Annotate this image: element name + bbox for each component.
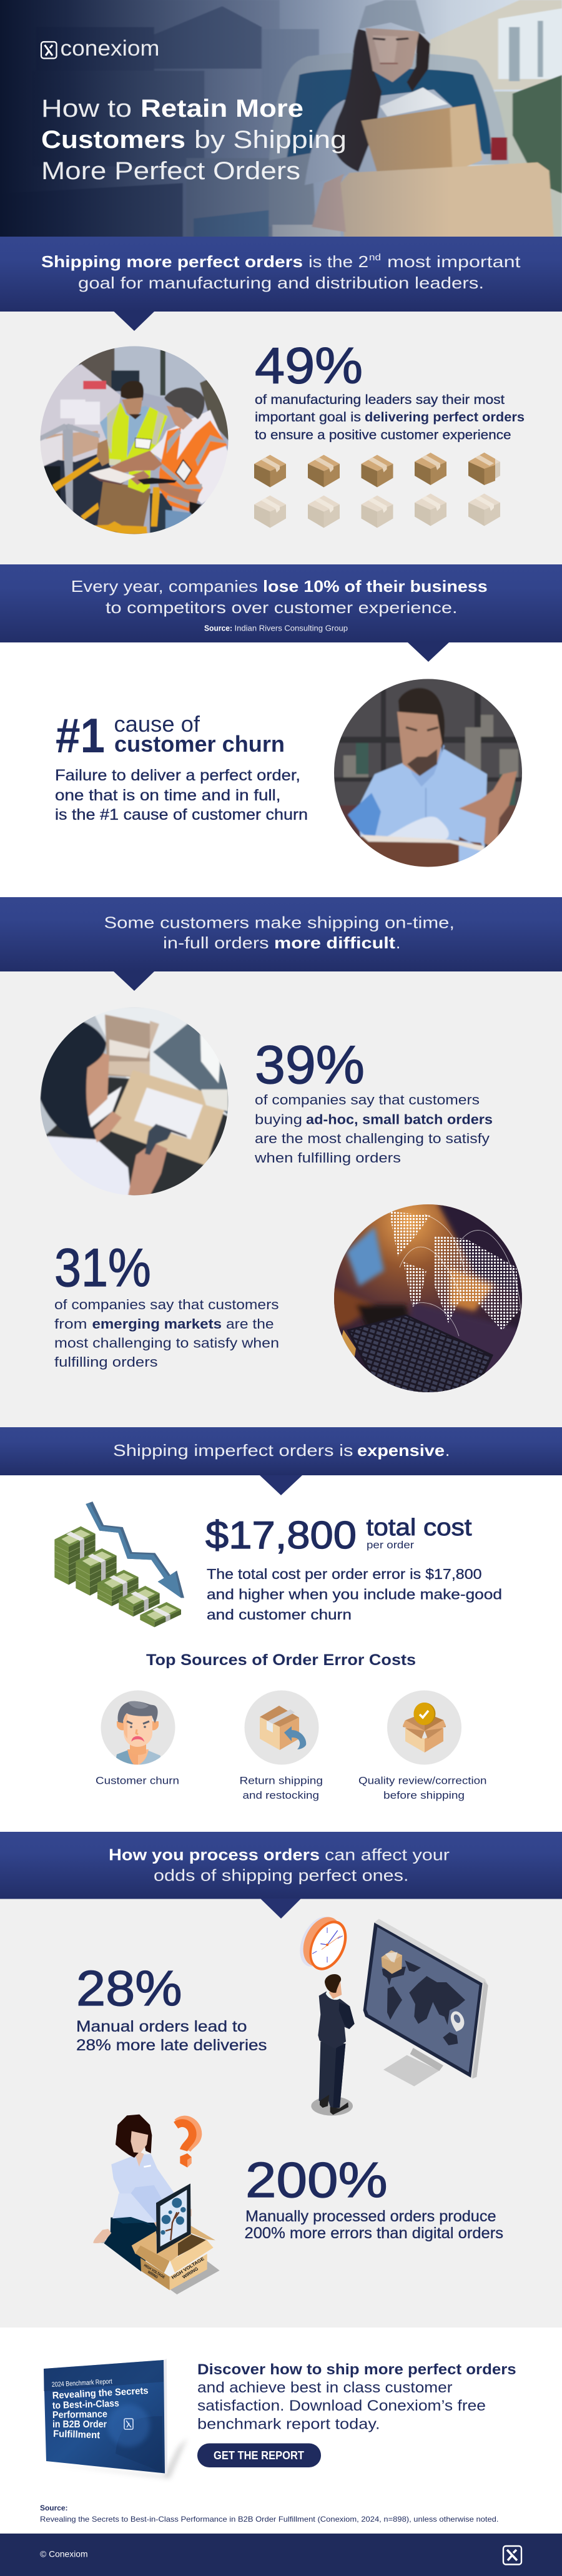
stat: number one cause of churn: #1 xyxy=(56,708,105,763)
banner: some customers: Some customers make shipping on-time, xyxy=(104,913,455,932)
banner: imperfect orders expensive xyxy=(0,1427,562,1495)
stat: total cost per order: and customer churn xyxy=(207,1606,352,1623)
stat: 49 percent: delivering perfect orders xyxy=(365,410,525,425)
banner: imperfect orders expensive: . xyxy=(445,1441,450,1460)
illustration: woman unpacking box: HIGH VOLTAGE xyxy=(143,2264,165,2279)
source note: Source: xyxy=(40,2504,67,2512)
banner: some customers: . xyxy=(396,933,400,952)
stat: 39 percent: of companies say that customers xyxy=(255,1092,480,1108)
man in suit xyxy=(311,1974,355,2116)
icon: conexiom mark xyxy=(503,2546,521,2565)
stat: total cost per order: total cost xyxy=(366,1515,472,1541)
stat: number one cause of churn: Failure to deliver a perfect order, xyxy=(55,767,300,784)
button: get the report xyxy=(197,2444,321,2467)
button: get the report: GET THE REPORT xyxy=(214,2449,304,2462)
stat: 49 percent: 49% xyxy=(255,337,363,395)
banner: lose 10 percent: Indian Rivers Consulting Group xyxy=(235,623,348,633)
panel: section one background xyxy=(0,312,562,564)
illustration: woman unpacking box xyxy=(93,2115,220,2294)
stat: 31 percent: are the xyxy=(226,1316,274,1332)
icon: customer churn xyxy=(101,1691,175,1765)
icon: quality review box xyxy=(387,1691,461,1764)
call to action text: and achieve best in class customer xyxy=(197,2379,452,2396)
photo: woman scanning parcel xyxy=(37,1005,231,1199)
call to action text: satisfaction. Download Conexiom’s free xyxy=(197,2397,486,2414)
stat: 39 percent xyxy=(254,1035,493,1166)
title: Retain More xyxy=(140,95,303,122)
report book cover: to Best-in-Class xyxy=(52,2398,119,2411)
stat: total cost per order: per order xyxy=(367,1539,414,1551)
stat: 200 percent: 200% more errors than digital orders xyxy=(245,2225,503,2242)
illustration: woman unpacking box: WIRING xyxy=(181,2266,199,2280)
photo: warehouse workers xyxy=(37,343,231,537)
illustration: woman unpacking box: HIGH VOLTAGE xyxy=(170,2256,205,2280)
stat: 200 percent xyxy=(245,2152,503,2242)
footer xyxy=(0,2534,562,2576)
stat: number one cause of churn: is the #1 cause of customer churn xyxy=(55,806,308,823)
panel: section three background xyxy=(0,971,562,1427)
banner: lose 10 percent: to competitors over customer experience. xyxy=(106,598,457,617)
stat: total cost per order xyxy=(205,1514,502,1623)
label: quality review before shipping: before shipping xyxy=(383,1789,465,1801)
title: How to xyxy=(41,95,132,122)
panel: section five background xyxy=(0,1899,562,2328)
stat: 31 percent: fulfilling orders xyxy=(54,1354,158,1370)
stat: 39 percent: when fulfilling orders xyxy=(254,1150,401,1166)
stat: 39 percent: are the most challenging to satisfy xyxy=(255,1131,490,1146)
title: Customers xyxy=(41,126,185,154)
stat: 28 percent: 28% more late deliveries xyxy=(76,2037,267,2054)
hero photo panel xyxy=(0,0,562,237)
banner: some customers: in-full orders xyxy=(163,933,269,952)
label: quality review before shipping: Quality review/correction xyxy=(358,1774,487,1787)
report book cover xyxy=(44,2359,187,2479)
stat: total cost per order: and higher when you include make-good xyxy=(207,1586,502,1602)
photo: frustrated customer xyxy=(331,677,526,871)
stat: 49 percent: to ensure a positive customer experience xyxy=(255,428,511,442)
source note xyxy=(40,2504,498,2524)
banner: shipping more perfect orders: nd xyxy=(369,252,381,263)
icon row: 49 of 100 boxes xyxy=(254,453,500,528)
call to action text xyxy=(197,2361,516,2432)
stat: 28 percent: Manual orders lead to xyxy=(76,2018,247,2035)
banner: some customers xyxy=(0,897,562,991)
banner: how you process orders: How you process orders xyxy=(109,1846,320,1864)
stat: number one cause of churn: one that is on time and in full, xyxy=(55,787,281,804)
report book cover: Performance xyxy=(52,2409,107,2421)
label: return shipping and restocking xyxy=(240,1774,323,1801)
stat: 39 percent: 39% xyxy=(255,1035,365,1095)
stat: 28 percent: 28% xyxy=(76,1960,182,2016)
icon: return shipping box xyxy=(245,1691,318,1764)
illustration: money stacks and falling arrow xyxy=(54,1502,184,1627)
stat: 39 percent: buying xyxy=(255,1111,302,1128)
report book cover: in B2B Order xyxy=(52,2419,107,2430)
banner: lose 10 percent: Every year, companies xyxy=(71,577,258,596)
banner: lose 10 percent: lose 10% of their business xyxy=(263,577,488,596)
banner: how you process orders: can affect your xyxy=(325,1846,450,1864)
photo: laptop with world map xyxy=(331,1202,526,1399)
stat: 31 percent xyxy=(54,1238,279,1370)
banner: how you process orders: odds of shipping perfect ones. xyxy=(154,1866,408,1884)
report book cover: Fulfillment xyxy=(53,2429,100,2441)
banner: imperfect orders expensive: Shipping imperfect orders is xyxy=(113,1441,353,1460)
stat: total cost per order: The total cost per order error is $17,800 xyxy=(207,1566,482,1582)
label: return shipping and restocking: Return shipping xyxy=(240,1774,323,1787)
stat: 31 percent: emerging markets xyxy=(92,1316,222,1332)
stat: 49 percent: of manufacturing leaders say their most xyxy=(255,393,505,407)
stat: total cost per order: $17,800 xyxy=(205,1514,357,1557)
icon: wall clock xyxy=(292,1910,354,1976)
label: customer churn: Customer churn xyxy=(96,1774,179,1787)
banner: shipping more perfect orders: Shipping more perfect orders xyxy=(41,252,303,271)
report book cover: Revealing the Secrets xyxy=(52,2386,149,2401)
stat: 31 percent: of companies say that customers xyxy=(54,1297,279,1312)
footer: © Conexiom xyxy=(40,2549,88,2559)
logo: conexiom: conexiom xyxy=(60,36,160,61)
title xyxy=(41,95,347,185)
stat: 49 percent: important goal is xyxy=(255,410,361,425)
stat: 39 percent: ad-hoc, small batch orders xyxy=(306,1111,493,1128)
stat: 31 percent: from xyxy=(54,1316,87,1332)
banner: shipping more perfect orders xyxy=(0,237,562,331)
stat: 31 percent: 31% xyxy=(54,1238,151,1298)
icon: question mark xyxy=(176,2120,198,2168)
title: by Shipping xyxy=(194,126,347,154)
stat: 31 percent: most challenging to satisfy when xyxy=(54,1335,279,1351)
banner: shipping more perfect orders: goal for manufacturing and distribution leaders. xyxy=(78,273,484,292)
call to action text: Discover how to ship more perfect orders xyxy=(197,2361,516,2378)
stat: 28 percent xyxy=(76,1960,267,2054)
stat: number one cause of churn xyxy=(55,708,308,823)
monitor xyxy=(363,1919,488,2087)
banner: imperfect orders expensive: expensive xyxy=(357,1441,445,1460)
title: More Perfect Orders xyxy=(41,157,300,185)
heading: top sources of order error costs: Top Sources of Order Error Costs xyxy=(146,1651,416,1669)
source note: Revealing the Secrets to Best-in-Class Performance in B2B Order Fulfillment (Conexiom, 2024, n=898), unless otherwise noted. xyxy=(40,2515,498,2524)
illustration: woman unpacking box: WIRING xyxy=(147,2271,159,2280)
stat: 200 percent: Manually processed orders produce xyxy=(245,2208,496,2225)
banner: shipping more perfect orders: most important xyxy=(387,252,521,271)
label: quality review before shipping xyxy=(358,1774,487,1801)
stat: number one cause of churn: cause of xyxy=(114,711,200,737)
banner: lose 10 percent xyxy=(0,564,562,662)
call to action text: benchmark report today. xyxy=(197,2416,380,2432)
banner: lose 10 percent: Source: xyxy=(204,623,232,633)
label: return shipping and restocking: and restocking xyxy=(242,1789,319,1801)
illustration: man looking at world map monitor with clock xyxy=(292,1910,488,2116)
stat: 200 percent: 200% xyxy=(245,2152,388,2208)
banner: how you process orders xyxy=(0,1832,562,1919)
stat: number one cause of churn: customer churn xyxy=(114,731,285,757)
banner: shipping more perfect orders: is the 2 xyxy=(308,252,368,271)
banner: some customers: more difficult xyxy=(274,933,395,952)
stat: 49 percent xyxy=(255,337,525,442)
report book cover: 2024 Benchmark Report xyxy=(51,2378,112,2389)
